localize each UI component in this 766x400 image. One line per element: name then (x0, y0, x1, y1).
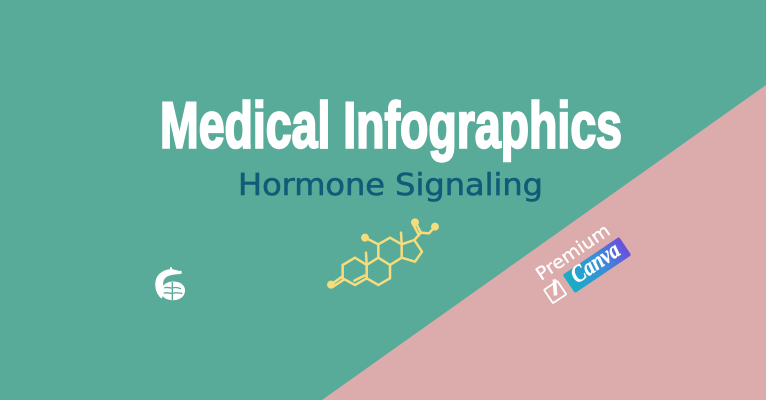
icon: edit checkbox (542, 279, 566, 303)
icon: steroid hormone molecule (327, 218, 439, 289)
premium label: Premium (532, 220, 614, 285)
premium canva badge (532, 220, 631, 303)
canva pill (563, 237, 631, 293)
subtitle: Hormone Signaling (238, 168, 543, 203)
pink diagonal panel (322, 85, 766, 400)
icon: brain logo (155, 267, 185, 300)
canva wordmark: Canva (566, 237, 625, 289)
